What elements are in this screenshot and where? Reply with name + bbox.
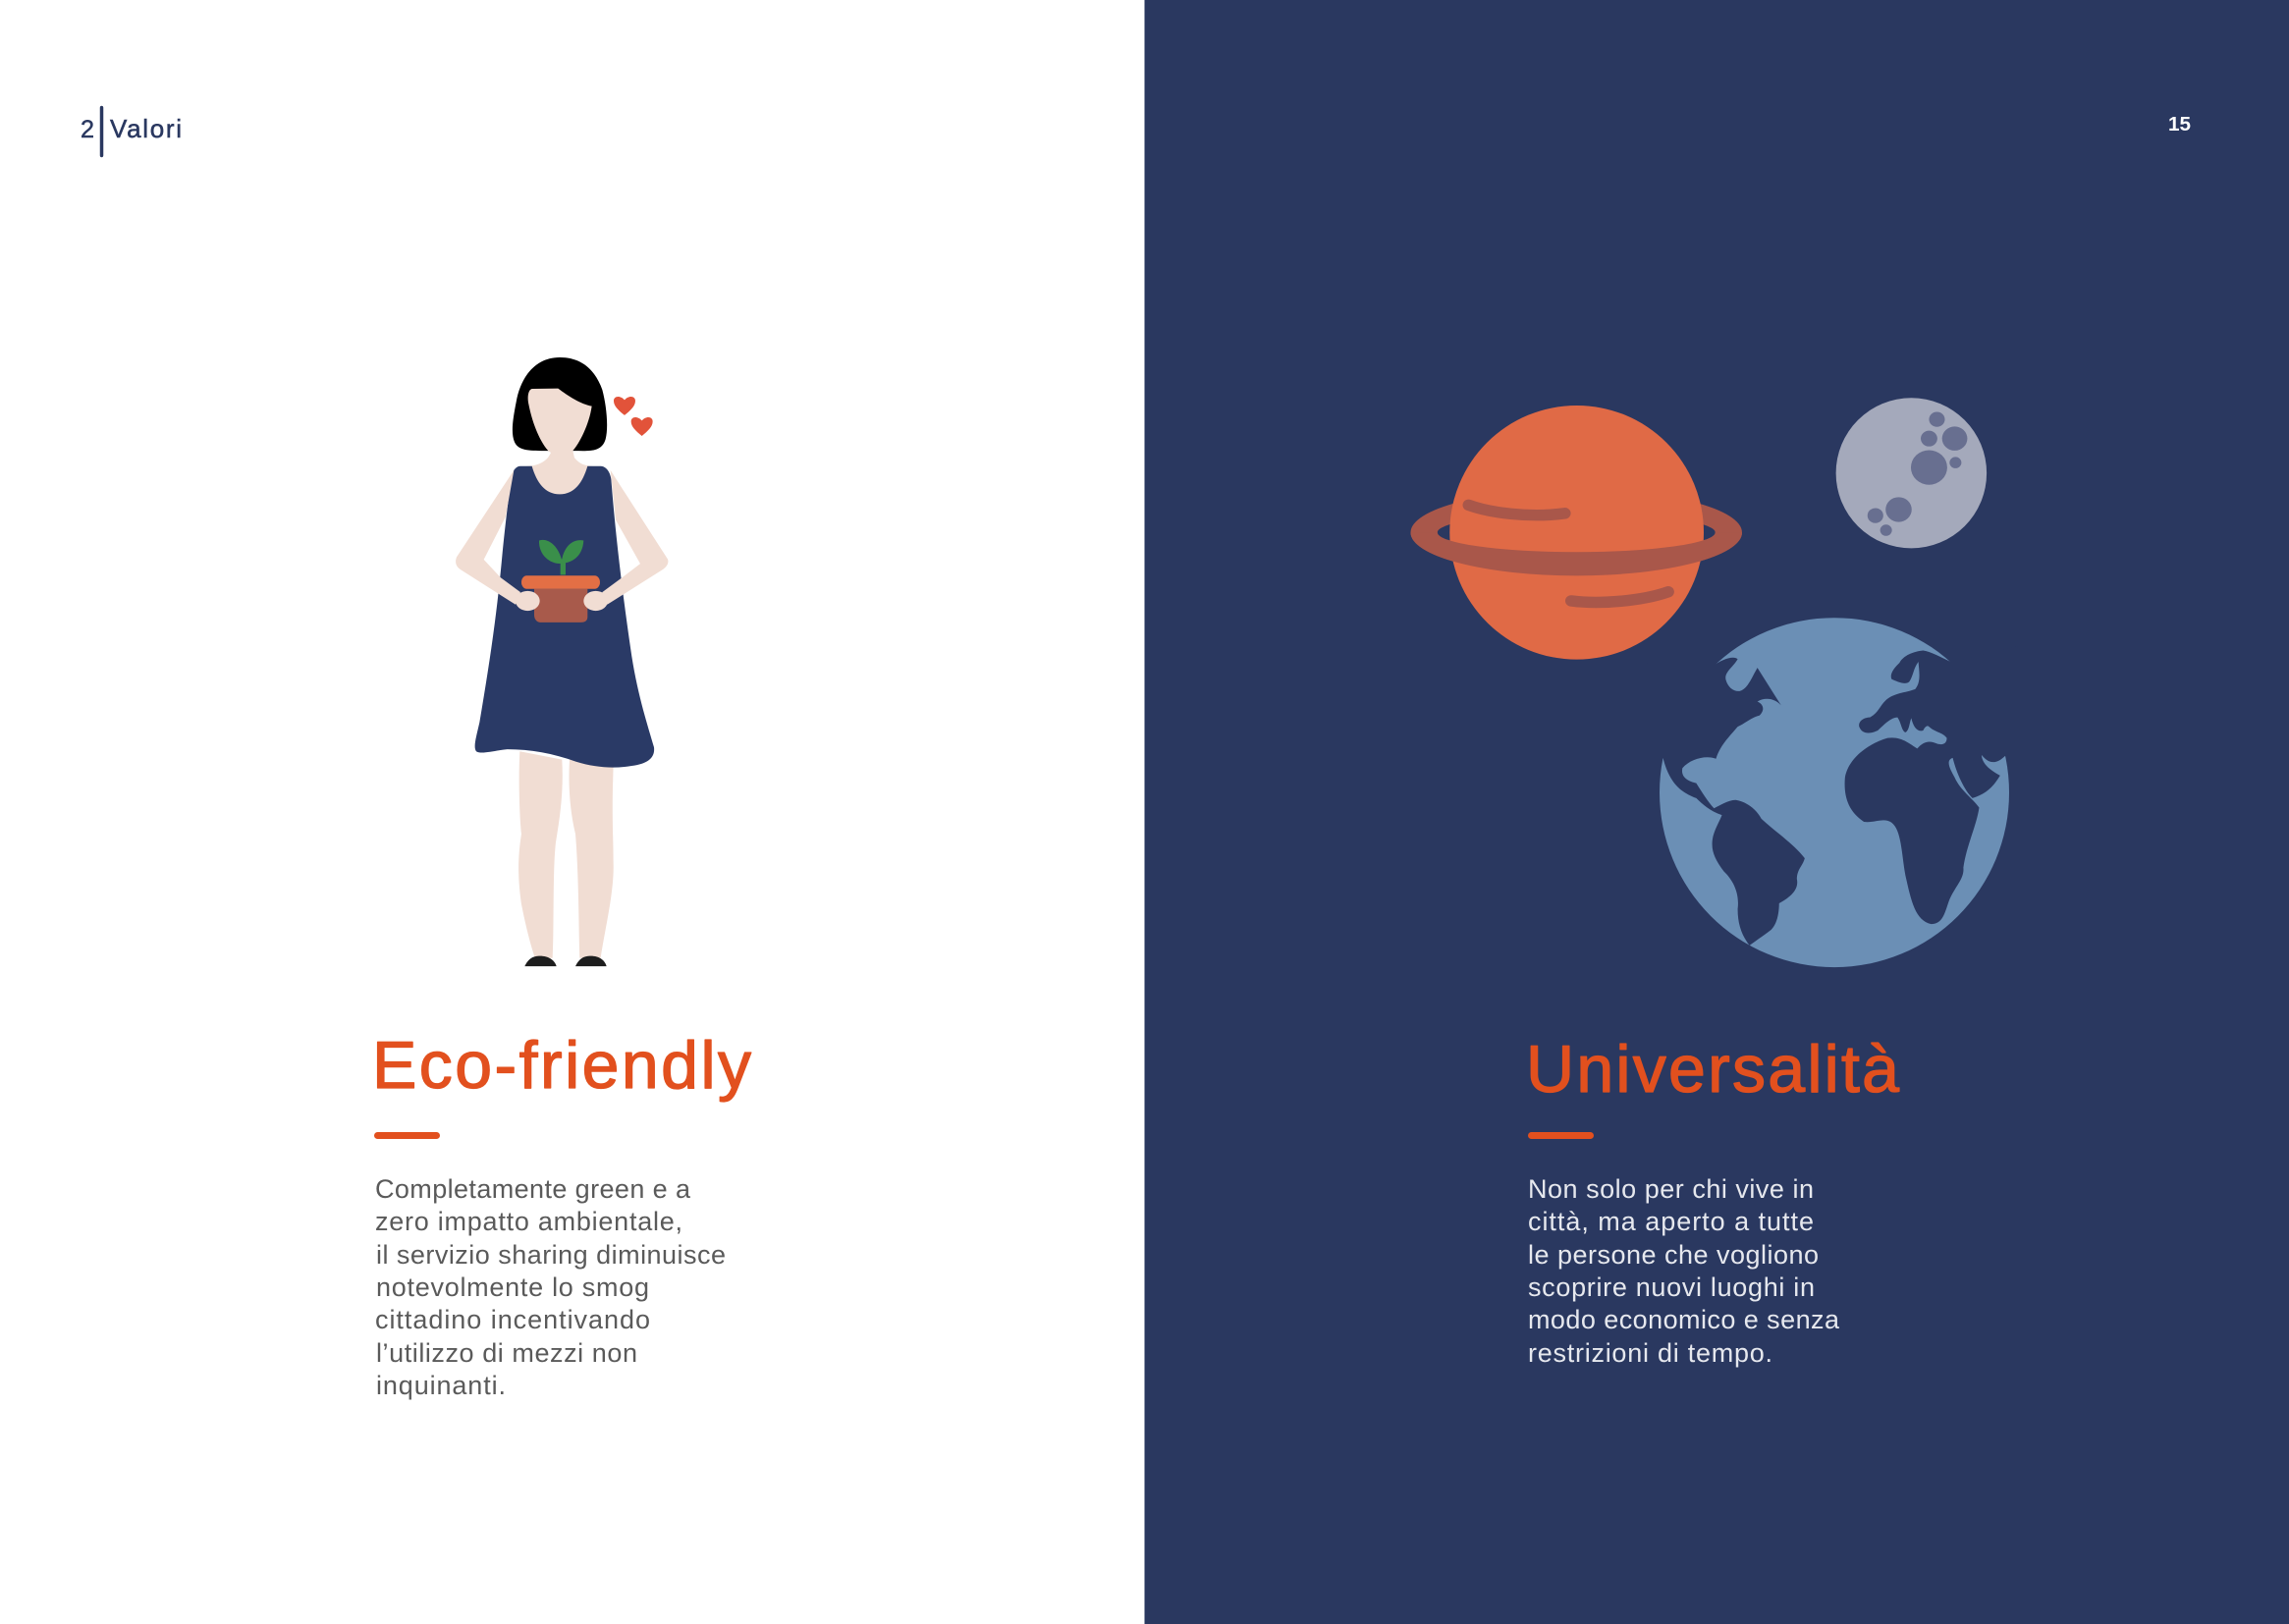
text block: Eco-friendly description: zero impatto ambientale,: [375, 1207, 682, 1236]
text block: Eco-friendly description: notevolmente lo smog: [376, 1272, 649, 1302]
accent rule: right: [1528, 1132, 1594, 1139]
text block: Universalità description: scoprire nuovi luoghi in: [1528, 1272, 1815, 1302]
face: [528, 389, 592, 455]
section header: 2 Valori: 2: [81, 116, 94, 143]
text block: Universalità description: Non solo per chi vive in: [1528, 1174, 1814, 1204]
shoes: [524, 956, 607, 966]
section header: 2 Valori: [81, 106, 182, 157]
illustration: planets: [1410, 398, 2018, 967]
text block: Universalità description: modo economico e senza: [1528, 1305, 1840, 1334]
text block: Eco-friendly description: Completamente green e a: [375, 1174, 691, 1204]
heading: Universalità: Universalità: [1526, 1032, 1899, 1107]
text block: Universalità description: città, ma aperto a tutte: [1528, 1207, 1814, 1236]
text block: Eco-friendly description: inquinanti.: [376, 1371, 506, 1400]
dress: [475, 466, 654, 768]
flower pot: [521, 575, 600, 623]
text block: Eco-friendly description: cittadino incentivando: [375, 1305, 650, 1334]
text block: Eco-friendly description: l’utilizzo di mezzi non: [376, 1338, 637, 1368]
heading: Eco-friendly: Eco-friendly: [372, 1028, 751, 1103]
panel: left white page: [0, 0, 1145, 1624]
text block: Eco-friendly description: [375, 1174, 726, 1400]
hearts: [614, 397, 653, 436]
accent rule: left: [374, 1132, 440, 1139]
earth: [1647, 618, 2018, 967]
text block: Eco-friendly description: il servizio sharing diminuisce: [376, 1240, 726, 1270]
legs: [518, 751, 614, 958]
text block: Universalità description: [1528, 1174, 1840, 1368]
panel: right navy page: [1145, 0, 2289, 1624]
illustration: girl holding a plant: [456, 357, 668, 966]
text block: Universalità description: le persone che vogliono: [1528, 1240, 1819, 1270]
page number: 15: [2168, 114, 2191, 135]
arms: [456, 470, 668, 611]
moon: [1836, 398, 1987, 548]
plant: [539, 540, 583, 574]
ringed orange planet: [1410, 406, 1742, 660]
neck and chest: [527, 451, 592, 499]
section header: 2 Valori: Valori: [110, 114, 182, 143]
hair: [513, 357, 607, 451]
text block: Universalità description: restrizioni di tempo.: [1528, 1338, 1772, 1368]
